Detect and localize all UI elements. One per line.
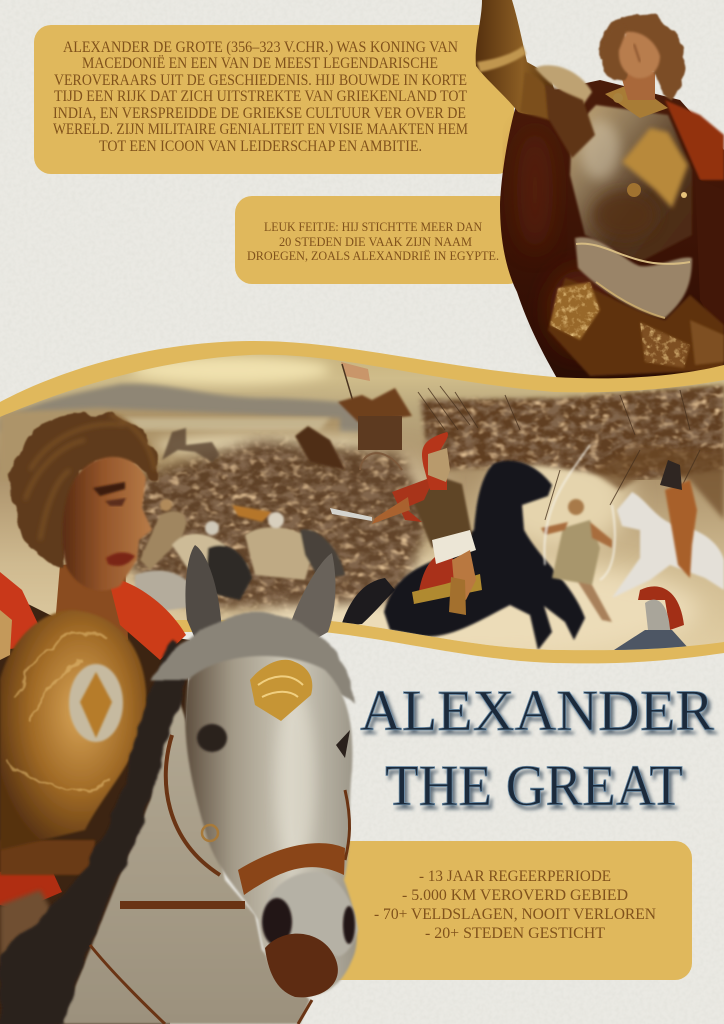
foreground helmet soldier <box>614 586 690 650</box>
sky glow <box>130 356 330 384</box>
biography text block: WERELD. ZIJN MILITAIRE GENIALITEIT EN VISIE MAAKTEN HEM <box>53 121 468 138</box>
army right <box>410 380 724 480</box>
gold wave band <box>0 341 724 663</box>
archer <box>541 445 615 622</box>
small background horse <box>162 428 220 462</box>
title: THE GREAT <box>385 753 683 818</box>
dust <box>155 433 375 457</box>
plains <box>0 406 342 442</box>
eyebrow and eye <box>93 482 125 496</box>
rider arm and leg <box>372 497 410 524</box>
key facts text block <box>374 868 656 942</box>
illustration: young Alexander with white horse <box>0 412 358 1024</box>
gorget <box>605 86 668 118</box>
fun fact text block: DROEGEN, ZOALS ALEXANDRIË IN EGYPTE. <box>247 248 499 263</box>
breastplate <box>570 105 692 262</box>
bridle straps <box>90 735 350 1024</box>
pauldron <box>535 65 592 105</box>
face <box>619 32 660 78</box>
dark armour body <box>0 590 190 1024</box>
mouth of horse <box>265 934 338 997</box>
hair highlights <box>25 415 155 540</box>
saddle cloth <box>413 557 454 604</box>
gold breastplate <box>0 610 146 850</box>
title <box>360 678 714 818</box>
hair <box>600 13 685 102</box>
biography text block: TOT EEN ICOON VAN LEIDERSCHAP EN AMBITIE. <box>99 138 422 155</box>
hair back <box>11 412 159 566</box>
key facts text block: - 5.000 KM VEROVERD GEBIED <box>402 887 628 904</box>
army left <box>120 430 440 620</box>
spears <box>418 386 700 520</box>
gold ornament <box>622 128 688 208</box>
horse neck <box>60 660 310 1024</box>
illustration: Alexander raising his arm <box>476 0 724 380</box>
skirt <box>548 278 724 376</box>
noseband <box>238 843 345 895</box>
fun fact text block: LEUK FEITJE: HIJ STICHTTE MEER DAN <box>264 219 483 234</box>
rider torso <box>408 476 472 548</box>
key facts text block: - 20+ STEDEN GESTICHT <box>425 925 606 942</box>
face <box>62 457 152 591</box>
raised arm <box>476 0 560 115</box>
black horse <box>384 461 585 650</box>
ears <box>185 545 335 650</box>
fun fact text block <box>247 219 499 263</box>
dark mane <box>0 640 195 1024</box>
waist armour <box>575 237 692 318</box>
sword <box>330 508 372 521</box>
neck <box>55 560 128 640</box>
helmet <box>422 432 448 490</box>
panel: fun fact <box>235 196 525 284</box>
horse eyes <box>197 724 227 752</box>
distant hills <box>0 384 380 432</box>
neck <box>620 72 655 100</box>
biography text block: VEROVERAARS UIT DE GESCHIEDENIS. HIJ BOUWDE IN KORTE <box>54 72 467 89</box>
red cape <box>0 572 186 660</box>
white horse with rider <box>612 460 724 598</box>
panel: key facts <box>320 841 692 980</box>
biography text block: MACEDONIË EN EEN VAN DE MEEST LEGENDARISCHE <box>82 55 438 72</box>
horse tail <box>341 578 395 626</box>
cape <box>500 80 724 380</box>
chariot horse <box>295 426 345 470</box>
biography text block: ALEXANDER DE GROTE (356–323 V.CHR.) WAS KONING VAN <box>63 39 458 56</box>
gold forehead ornament <box>250 660 312 721</box>
foreground soldiers group <box>135 499 345 615</box>
chariot and flag <box>338 362 412 470</box>
mouth <box>106 552 135 566</box>
biography text block: TIJD EEN RIJK DAT ZICH UITSTREKTE VAN GRIEKENLAND TOT <box>54 88 467 105</box>
key facts text block: - 13 JAAR REGEERPERIODE <box>419 868 611 885</box>
title: ALEXANDER <box>360 678 714 743</box>
red cape right <box>665 100 724 180</box>
lead rider on black horse <box>330 432 585 650</box>
battle scene <box>0 340 724 660</box>
key facts text block: - 70+ VELDSLAGEN, NOOIT VERLOREN <box>374 906 656 923</box>
forelock <box>150 612 356 705</box>
army on right side, lower <box>590 445 724 520</box>
biography text block: INDIA, EN VERSPREIDDE DE GRIEKSE CULTUUR VER OVER DE <box>53 105 466 122</box>
upper arm armour <box>520 72 551 120</box>
horse head <box>185 656 357 996</box>
muzzle <box>262 872 358 956</box>
fun fact text block: 20 STEDEN DIE VAAK ZIJN NAAM <box>279 234 472 249</box>
panel: biography text <box>34 25 514 174</box>
biography text block <box>53 39 468 155</box>
